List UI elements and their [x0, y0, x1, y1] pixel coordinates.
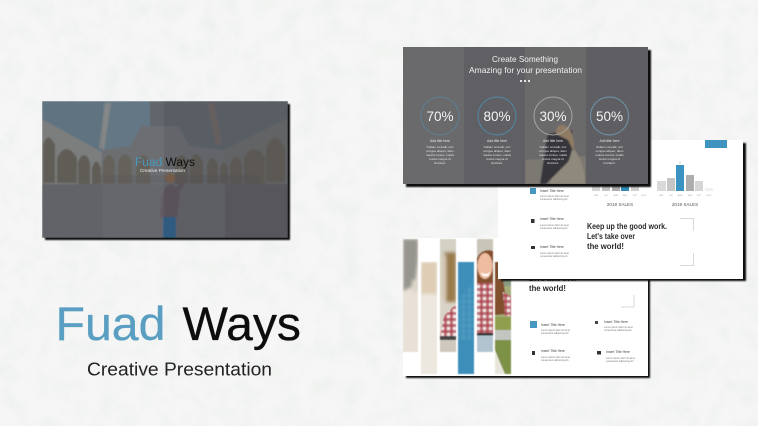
stat 50%: Nullam convalli, orci: [596, 145, 623, 149]
heading: Amazing for your presentation: [469, 65, 582, 75]
slide heading: Keep up the good work.: [587, 222, 667, 231]
stat 80%: [478, 97, 516, 165]
list item: bottom left: [532, 349, 570, 362]
stat 50%: lectus magna id: [599, 157, 620, 161]
list item: top left: Lorem ipsum dolor sit amet: [541, 329, 570, 332]
slide heading: [529, 274, 578, 293]
panel: percentages slide: [403, 47, 651, 187]
stat 50%: congue aliquet, diam: [596, 149, 624, 153]
stat 80%: congue aliquet, diam: [483, 149, 511, 153]
stat 70%: mauris cursus, mattis: [426, 153, 455, 157]
list item: top right: [595, 320, 633, 332]
list item 2: [531, 217, 569, 230]
corner brackets: [680, 218, 694, 266]
overlay columns: [103, 101, 164, 238]
strip 2: [421, 262, 437, 374]
stat 70%: lectus magna id: [429, 157, 451, 161]
list item: bottom right: Insert Title Here: [606, 350, 630, 354]
bar chart: 2019 sales: 8: [679, 162, 681, 164]
three dots: [520, 80, 530, 82]
list item 3: consectetur adipiscing elit: [540, 255, 568, 258]
blue strip: [458, 262, 474, 374]
list item: bottom left: Insert Title Here: [541, 349, 565, 353]
stat 70%: 70%: [426, 109, 454, 124]
stat 80%: lectus magna id: [486, 157, 508, 161]
bar chart: 2018 sales: JUL: [604, 195, 609, 197]
stat 30%: lectus magna id: [542, 157, 564, 161]
panel: photo strips slide: [403, 238, 650, 378]
photo strips: [403, 239, 511, 374]
corner bracket: [621, 295, 634, 307]
list item: bottom right: consectetur adipiscing elit: [606, 360, 634, 363]
blue tab: [705, 140, 727, 148]
list item: bottom right: [597, 350, 635, 363]
list item 1: Lorem ipsum dolor sit amet: [540, 195, 569, 198]
stat 70%: congue aliquet, diam: [426, 149, 454, 153]
stat 50%: 50%: [596, 109, 623, 124]
list item 3: Insert Title Here: [540, 245, 564, 249]
stat 50%: tincidunt.: [603, 161, 616, 165]
stat 30%: [534, 97, 572, 165]
panel: sales slide: [498, 140, 746, 281]
list item 2: consectetur adipiscing elit: [540, 227, 568, 230]
strip 1: [403, 239, 418, 352]
stat 30%: tincidunt.: [547, 161, 559, 165]
stat 80%: tincidunt.: [491, 161, 503, 165]
heading: Create Something: [492, 54, 558, 64]
slide heading: Let's take over: [529, 274, 578, 283]
list item: top right: consectetur adipiscing elit: [604, 329, 632, 332]
stat 50%: mauris cursus, mattis: [595, 153, 624, 157]
strip 6: [495, 262, 511, 374]
photo: mosque courtyard: [42, 101, 288, 238]
bar chart: 2018 sales: AUG: [614, 194, 619, 197]
cover slide subtitle: Creative Presentation: [140, 168, 186, 173]
list item: bottom left: Lorem ipsum dolor sit amet: [541, 356, 570, 359]
stat 80%: Add title here: [487, 139, 507, 143]
list item: top right: Lorem ipsum dolor sit amet: [604, 326, 633, 329]
list item 1: Insert Title Here: [540, 189, 564, 193]
title: Fuad Ways: Ways: [182, 297, 301, 350]
stat 30%: mauris cursus, mattis: [539, 153, 568, 157]
stat 70%: tincidunt.: [434, 161, 446, 165]
stat 30%: 30%: [539, 109, 567, 124]
bar chart: 2018 sales: [592, 180, 647, 207]
list item 3: [531, 245, 569, 258]
strip 5 with woman: [477, 239, 493, 352]
bar chart: 2019 sales: JUN: [659, 195, 664, 197]
slide heading: the world!: [587, 242, 624, 251]
bar chart: 2019 sales: NOV: [707, 195, 712, 197]
title: Fuad Ways: Fuad: [56, 297, 166, 350]
stat 80%: mauris cursus, mattis: [483, 153, 512, 157]
list item 3: Lorem ipsum dolor sit amet: [540, 252, 569, 255]
list item 2: Insert Title Here: [540, 217, 564, 221]
bar chart: 2019 sales: SEP: [688, 195, 693, 197]
photo: woman at desk: [525, 125, 586, 184]
slide heading: Let's take over: [587, 232, 636, 241]
subtitle: Creative Presentation: Creative Presentation: [87, 358, 272, 380]
bar chart: 2019 sales: AUG: [678, 194, 683, 197]
list item: top left: Insert Title Here: [541, 323, 565, 327]
stat 80%: Nullam convalli, orci: [484, 145, 511, 149]
slide heading: [587, 222, 667, 251]
list item: top left: consectetur adipiscing elit: [541, 332, 569, 335]
bar chart: 2018 sales: SEP: [623, 195, 628, 197]
panel: mosque cover slide: [42, 101, 290, 240]
bar chart: 2018 sales: OCT: [633, 195, 638, 197]
slide heading: the world!: [529, 284, 566, 293]
stat 50%: Add title here: [600, 139, 620, 143]
bar chart: 2019 sales: JUL: [669, 195, 674, 197]
list item 1: consectetur adipiscing elit: [540, 198, 568, 201]
stat 50%: [590, 97, 628, 165]
heading: [469, 54, 582, 75]
stat 80%: 80%: [483, 109, 511, 124]
bar chart: 2019 sales: OCT: [697, 195, 702, 197]
bar chart: 2019 sales: [657, 162, 713, 207]
list item 1: [530, 188, 569, 201]
list item: bottom right: Lorem ipsum dolor sit amet: [606, 357, 635, 360]
cover slide title: Fuad Ways: [135, 157, 195, 169]
bar chart: 2018 sales: 2018 SALES: [607, 202, 633, 207]
stat 70%: Nullam convalli, orci: [427, 145, 454, 149]
stat 30%: congue aliquet, diam: [539, 149, 567, 153]
title: Fuad Ways: [56, 297, 301, 350]
list item: bottom left: consectetur adipiscing elit: [541, 359, 569, 362]
bar chart: 2018 sales: JUN: [594, 195, 599, 197]
strip 3: [440, 239, 456, 352]
stat 30%: Add title here: [543, 139, 563, 143]
bar chart: 2019 sales: 2019 SALES: [672, 202, 698, 207]
list item: top right: Insert Title Here: [604, 320, 628, 324]
list item: top left: [530, 321, 570, 335]
list item 2: Lorem ipsum dolor sit amet: [540, 224, 569, 227]
stat 70%: Add title here: [430, 139, 450, 143]
stat 70%: [421, 97, 459, 165]
stat 30%: Nullam convalli, orci: [540, 145, 567, 149]
bar chart: 2018 sales: NOV: [642, 195, 647, 197]
